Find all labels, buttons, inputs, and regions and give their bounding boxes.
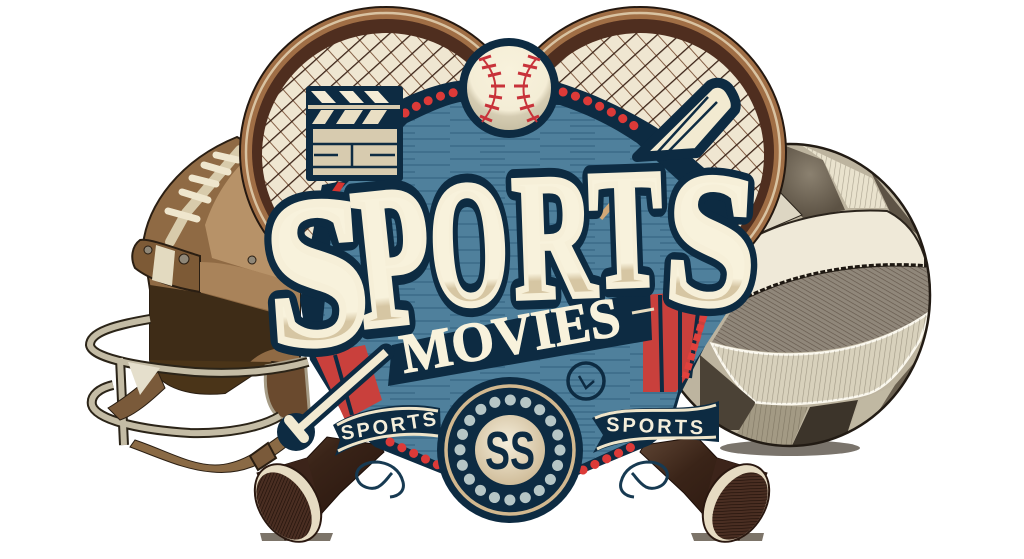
red side stripes: [315, 345, 382, 420]
icon: left racket: [240, 7, 532, 297]
panel: central shield: [300, 80, 750, 475]
title: SPORTS: P: [345, 145, 441, 369]
icon: baseball: [459, 38, 559, 138]
ribbon: left SPORTS: [333, 405, 441, 456]
title: SPORTS: S: [661, 133, 761, 346]
icon: right racket: [494, 7, 786, 297]
title: SPORTS: R: [510, 138, 599, 337]
chin strap: [130, 432, 292, 473]
icon: leather football helmet: [90, 137, 310, 473]
icon: lower baseball bat: [277, 352, 386, 451]
volleyball: top cream panel: [800, 144, 887, 208]
title: SPORTS: T: [587, 137, 665, 323]
ribbon: right SPORTS: [592, 401, 719, 453]
icon: volleyball: [681, 142, 932, 456]
title: SPORTS: S: [259, 153, 375, 392]
football laces: [168, 150, 240, 242]
title: SPORTS: [259, 133, 761, 392]
title: SPORTS: O: [425, 145, 513, 344]
emblem: SS seal: SS: [485, 421, 535, 481]
title: SPORTS: P: [345, 145, 441, 369]
volleyball: lower cream band: [712, 312, 930, 404]
title: SPORTS: T: [587, 137, 665, 323]
emblem: SS seal: [437, 377, 583, 523]
icon: upper baseball bat: [600, 83, 736, 218]
title: SPORTS: S: [661, 133, 761, 346]
subtitle: MOVIES: MOVIES: [395, 286, 625, 386]
red corner fragment: [332, 182, 345, 193]
helmet brow band: [132, 240, 200, 292]
title: SPORTS: S: [259, 153, 375, 392]
icon: small clock: [568, 363, 604, 399]
icon: right bell-end handle: [640, 437, 783, 554]
ribbon: right SPORTS: SPORTS: [606, 414, 704, 439]
ribbon: left SPORTS: SPORTS: [339, 408, 438, 445]
banner: movies band: [388, 290, 654, 386]
title: SPORTS: O: [425, 145, 513, 344]
icon: left bell-end handle: [241, 437, 384, 554]
red dotted border: [390, 92, 643, 470]
icon: string curls: [357, 462, 667, 497]
volleyball: top dark panel: [781, 146, 845, 218]
volleyball: right dark panel: [872, 174, 917, 234]
volleyball: upper cream band: [748, 210, 926, 298]
icon: clapperboard: [306, 86, 403, 181]
volleyball: hatched grey band: [712, 267, 932, 353]
title: SPORTS: R: [510, 138, 599, 337]
volleyball: bottom panels: [700, 355, 755, 430]
face mask: [90, 319, 308, 445]
